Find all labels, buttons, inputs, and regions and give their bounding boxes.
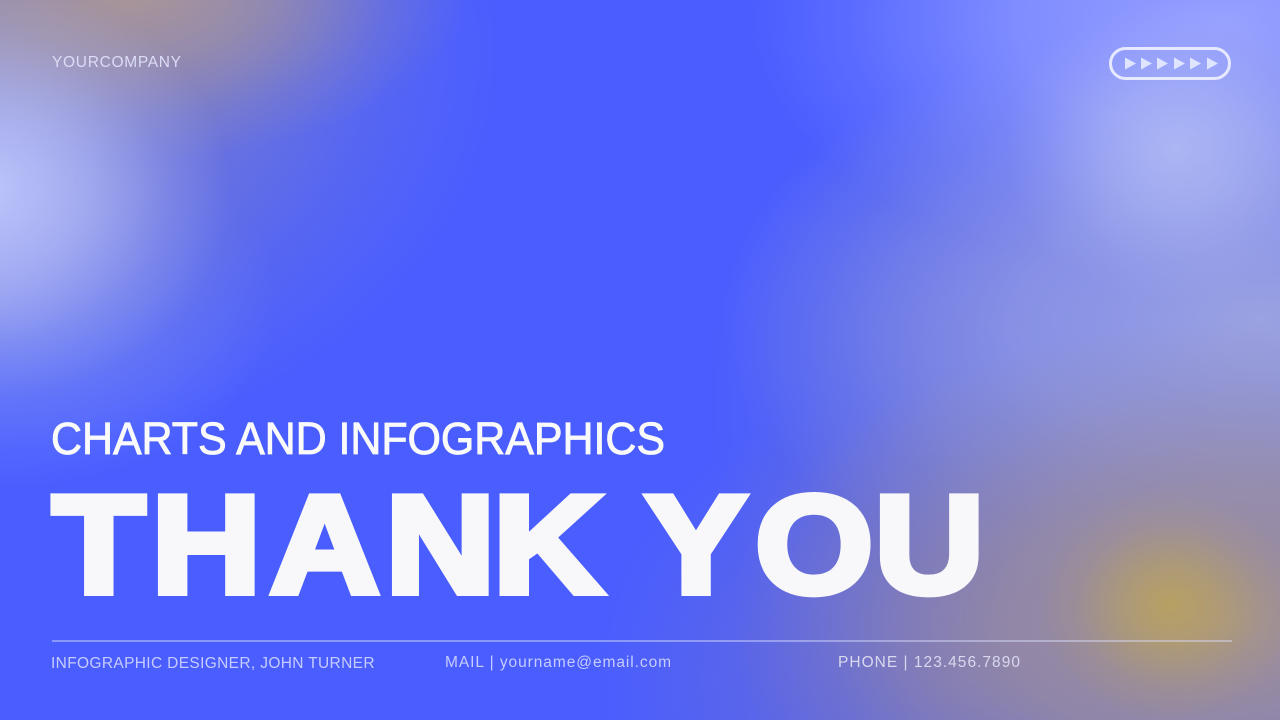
- phone contact: PHONE | 123.456.7890: [838, 654, 1021, 671]
- subtitle: CHARTS AND INFOGRAPHICS: [51, 414, 665, 464]
- company name: YOURCOMPANY: [52, 54, 182, 71]
- main title: THANK YOU: [53, 466, 984, 622]
- icon: arrow pill badge: [1109, 47, 1231, 80]
- designer credit: INFOGRAPHIC DESIGNER, JOHN TURNER: [51, 655, 375, 672]
- mail contact: MAIL | yourname@email.com: [445, 654, 672, 671]
- divider line: [52, 640, 1232, 642]
